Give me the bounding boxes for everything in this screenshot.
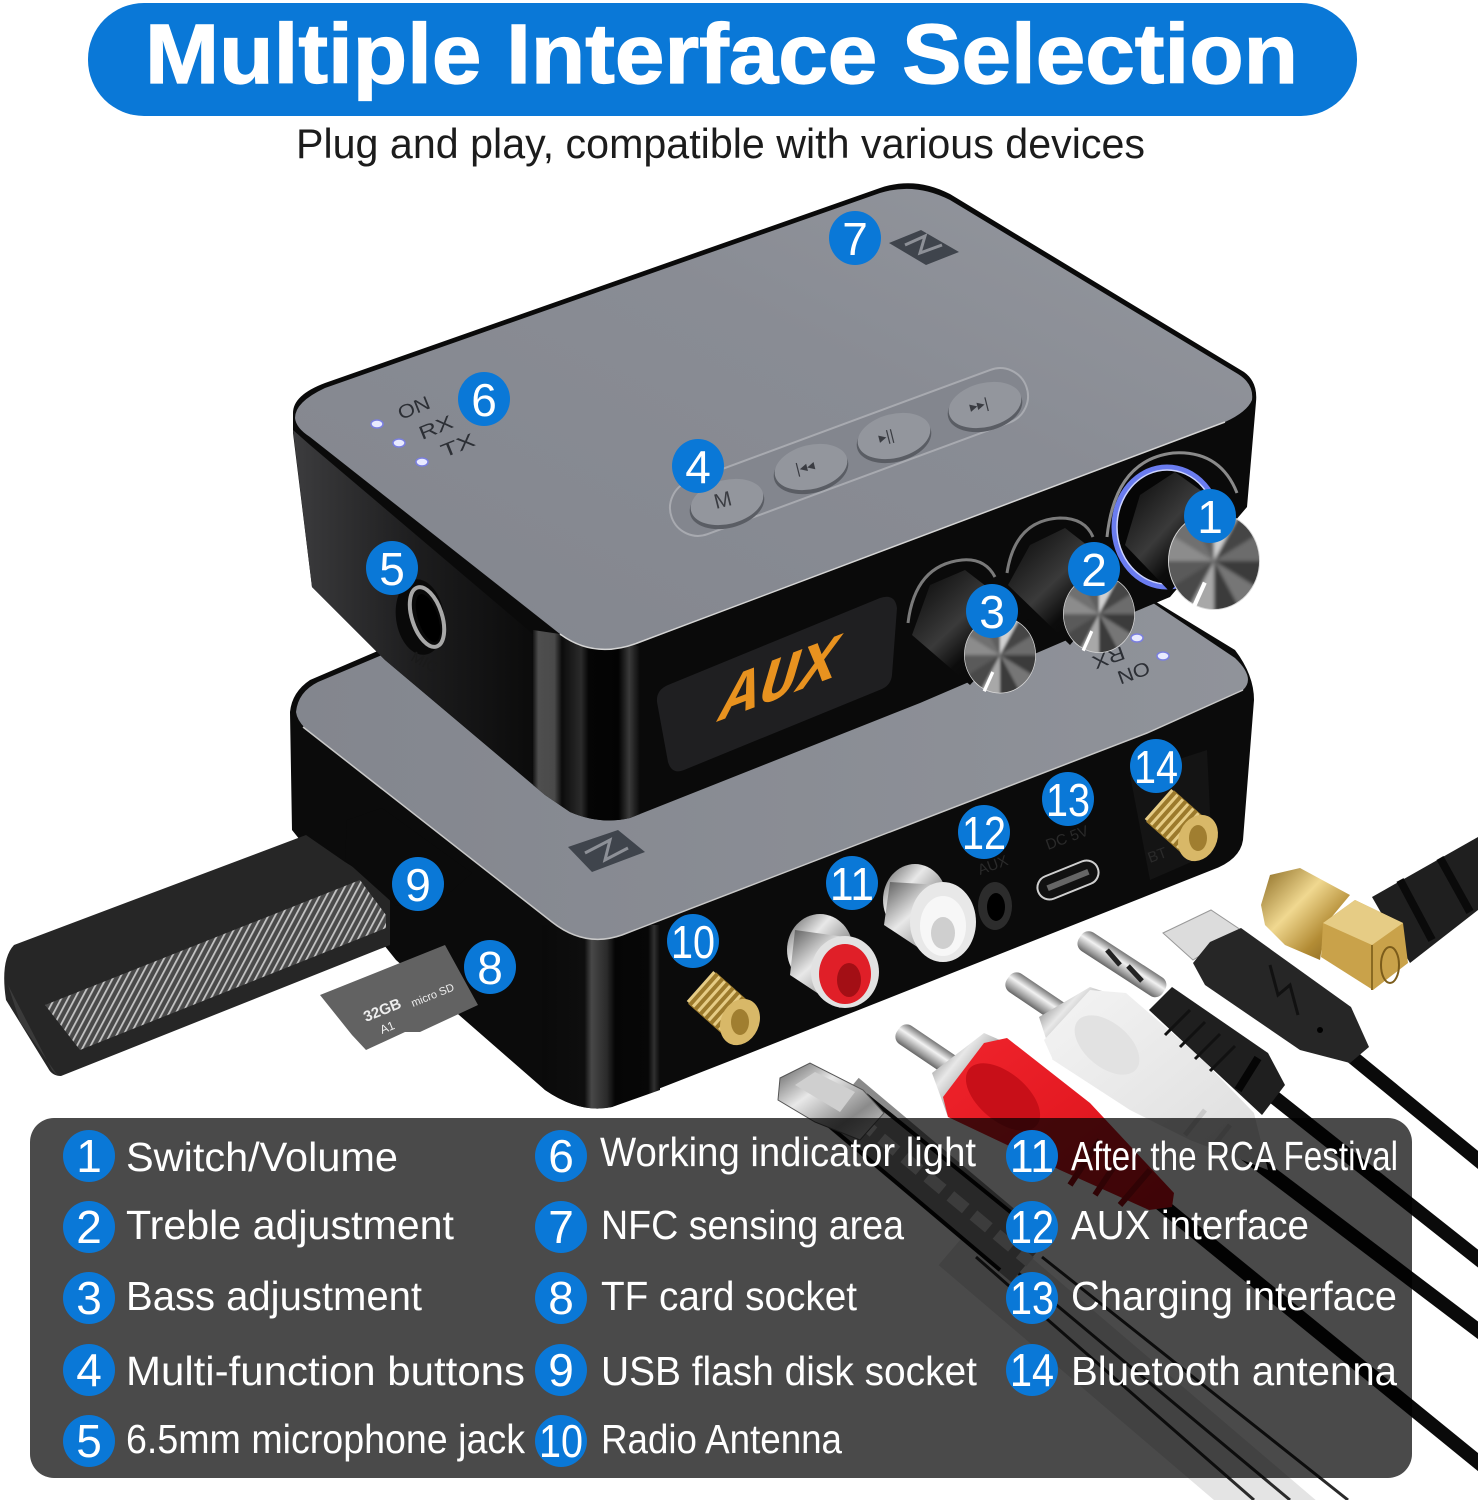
upper front edge highlight <box>560 422 1225 649</box>
callout 6 <box>458 372 510 426</box>
legend item 2: 2 <box>76 1201 102 1253</box>
legend item 8: TF card socket <box>601 1273 858 1319</box>
play pause button: ▸|| <box>877 427 896 447</box>
lower top edge highlight <box>303 690 1243 939</box>
title banner: Multiple Interface Selection <box>145 7 1298 101</box>
lower indicators: RX <box>1089 641 1127 672</box>
red RCA socket <box>787 914 879 1008</box>
cables and plugs <box>778 837 1478 1500</box>
callout 4 <box>672 439 724 493</box>
callout 12: 12 <box>962 807 1006 859</box>
callout 2 <box>1068 542 1120 596</box>
callout 1: 1 <box>1197 491 1223 543</box>
callout 9 <box>392 857 444 911</box>
play pause button <box>852 406 936 471</box>
legend item 10: 10 <box>539 1415 583 1467</box>
micro SD card: micro SD <box>410 982 456 1010</box>
callout 5: 5 <box>379 543 405 595</box>
lower indicators <box>1089 634 1169 687</box>
upper device <box>293 183 1269 820</box>
callout 3 <box>966 584 1018 638</box>
right end panel <box>1130 750 1212 880</box>
indicator LEDs and labels: ON <box>395 393 433 425</box>
indicator LEDs and labels: RX <box>416 412 457 445</box>
legend panel <box>30 1118 1412 1478</box>
microphone jack: MIC <box>408 649 441 677</box>
USB-C plug <box>1163 910 1369 1063</box>
legend item 9: USB flash disk socket <box>601 1348 978 1394</box>
legend item 3: Bass adjustment <box>126 1273 423 1319</box>
upper device black body <box>293 183 1256 820</box>
lower device grey top <box>296 603 1248 939</box>
subtitle: Plug and play, compatible with various devices <box>296 120 1145 167</box>
legend item 14: 14 <box>1010 1344 1054 1396</box>
lower NFC logo <box>568 830 645 872</box>
callout 7 <box>829 211 881 265</box>
callout 8: 8 <box>477 942 503 994</box>
upper corner highlight <box>533 630 640 820</box>
callout 2: 2 <box>1081 544 1107 596</box>
legend item 4: 4 <box>76 1344 102 1396</box>
legend background <box>30 1118 1412 1478</box>
callout 7: 7 <box>842 213 868 265</box>
legend item 7: 7 <box>548 1201 574 1253</box>
callout 10: 10 <box>671 916 715 968</box>
callout 11: 11 <box>830 858 874 910</box>
indicator LEDs and labels <box>371 393 479 466</box>
legend item 4: Multi-function buttons <box>126 1348 525 1394</box>
knob 1 volume with blue ring <box>1107 453 1269 620</box>
legend item 9: 9 <box>548 1344 574 1396</box>
legend item 2: Treble adjustment <box>126 1202 455 1248</box>
gold SMA antenna <box>1261 837 1478 990</box>
legend item 12: 12 <box>1010 1201 1054 1253</box>
legend item 6: 6 <box>548 1130 574 1182</box>
micro SD card: 32GB <box>361 995 404 1026</box>
upper device grey top <box>295 189 1252 649</box>
previous button <box>769 437 853 502</box>
USB flash drive <box>4 808 472 1076</box>
legend item 7 <box>535 1201 904 1253</box>
BT label: BT <box>1146 844 1169 867</box>
legend item 12 <box>1006 1201 1309 1253</box>
next button <box>943 375 1027 440</box>
legend item 7: NFC sensing area <box>601 1202 904 1248</box>
legend item 10 <box>535 1415 842 1467</box>
AUX jack: AUX <box>976 852 1010 879</box>
callout numbers on the product <box>366 211 1236 994</box>
Bluetooth antenna socket <box>1158 804 1225 868</box>
legend item 12: AUX interface <box>1071 1202 1309 1248</box>
legend item 13: 13 <box>1010 1272 1054 1324</box>
legend item 11 <box>1006 1130 1398 1182</box>
button strip <box>662 360 1036 544</box>
mode button <box>685 472 769 537</box>
legend item 13: Charging interface <box>1071 1273 1397 1319</box>
AUX jack <box>976 852 1012 930</box>
legend item 11: After the RCA Festival <box>1071 1133 1398 1179</box>
callout 9: 9 <box>405 859 431 911</box>
lower device corner highlight <box>542 925 660 1109</box>
legend item 1: Switch/Volume <box>126 1134 398 1180</box>
legend item 14: Bluetooth antenna <box>1071 1348 1397 1394</box>
coaxial cable with silver connector <box>778 1063 1348 1500</box>
previous button: |◂◂ <box>794 457 817 478</box>
lower indicators: ON <box>1114 656 1152 687</box>
legend item 3: 3 <box>76 1272 102 1324</box>
callout 5 <box>366 541 418 595</box>
legend item 10: Radio Antenna <box>601 1416 842 1462</box>
knob 3 bass <box>908 560 1043 701</box>
legend item 1: 1 <box>76 1130 102 1182</box>
callout 1 <box>1184 489 1236 543</box>
red RCA plug <box>892 1021 1174 1210</box>
callout 6: 6 <box>471 374 497 426</box>
legend item 6: Working indicator light <box>600 1129 977 1175</box>
microphone jack <box>391 576 451 677</box>
legend item 8 <box>535 1272 858 1324</box>
black cables <box>1150 1055 1478 1480</box>
indicator LEDs and labels: TX <box>438 430 479 463</box>
callout 4: 4 <box>685 441 711 493</box>
lower device body <box>290 600 1254 1109</box>
callout 14: 14 <box>1134 741 1178 793</box>
legend item 8: 8 <box>548 1272 574 1324</box>
micro SD card: A1 <box>378 1018 397 1037</box>
callout 8 <box>464 940 516 994</box>
white RCA plug <box>1002 969 1268 1170</box>
callout 3: 3 <box>979 586 1005 638</box>
3.5mm AUX plug <box>1074 928 1285 1115</box>
radio antenna socket <box>700 986 767 1052</box>
legend item 5: 5 <box>76 1415 102 1467</box>
legend item 5: 6.5mm microphone jack <box>126 1416 525 1462</box>
upper left side face <box>293 430 540 790</box>
LED display <box>657 597 897 771</box>
LED display: AUX <box>710 620 849 743</box>
USB-C port <box>1034 857 1102 903</box>
next button: ▸▸| <box>968 395 990 416</box>
upper NFC logo <box>889 230 959 265</box>
white RCA socket <box>883 864 976 962</box>
callout 13: 13 <box>1046 774 1090 826</box>
knob 2 treble <box>1007 518 1142 661</box>
DC 5V label: DC 5V <box>1044 823 1091 854</box>
lower device <box>290 600 1254 1109</box>
legend item 11: 11 <box>1010 1130 1054 1182</box>
micro SD card <box>320 945 478 1050</box>
mode button: M <box>712 487 734 514</box>
